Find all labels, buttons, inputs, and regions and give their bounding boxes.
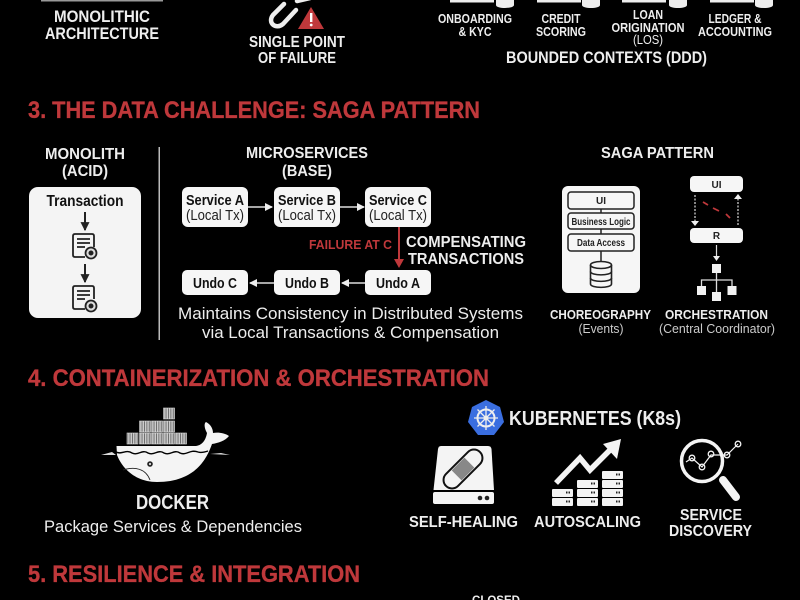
panel: monolithic architecture: ARCHITECTURE <box>45 25 159 43</box>
bounded context: credit scoring: CREDIT <box>542 11 581 26</box>
service B <box>274 187 340 227</box>
bounded context: credit scoring: SCORING <box>536 24 586 39</box>
label: compensating transactions: TRANSACTIONS <box>408 251 524 268</box>
bounded context: loan origination: (LOS) <box>633 32 663 47</box>
panel: kubernetes: KUBERNETES (K8s) <box>509 408 681 430</box>
choreography card <box>562 186 640 293</box>
icon: document 2 <box>73 286 96 312</box>
icon: database <box>590 262 612 287</box>
panel: single point of failure: OF FAILURE <box>258 50 336 67</box>
arrow: undo B to C <box>250 282 274 284</box>
arrow: undo A to B <box>342 282 365 284</box>
panel: bounded contexts <box>438 0 773 67</box>
undo B: Undo B <box>285 276 329 292</box>
bounded context: ledger and accounting: ACCOUNTING <box>698 24 772 39</box>
orchestration diagram: UI <box>712 180 722 191</box>
bounded context: loan origination: ORIGINATION <box>612 20 684 35</box>
card: transaction <box>29 187 141 318</box>
label: failure at C: FAILURE AT C <box>309 237 393 252</box>
panel: microservices BASE: MICROSERVICES <box>246 145 368 162</box>
service C: (Local Tx) <box>369 208 427 224</box>
service A: Service A <box>186 193 244 209</box>
label: orchestration: ORCHESTRATION <box>665 307 768 322</box>
bounded context: onboarding and KYC: & KYC <box>458 24 492 39</box>
card: transaction: Transaction <box>46 193 124 210</box>
panel: docker <box>44 408 302 536</box>
panel: bounded contexts: BOUNDED CONTEXTS (DDD) <box>506 48 707 67</box>
orchestration diagram <box>690 176 743 301</box>
label: orchestration <box>659 307 775 336</box>
undo B <box>274 270 340 295</box>
undo C: Undo C <box>193 276 237 292</box>
panel: saga pattern <box>550 145 775 336</box>
icon: warning triangle <box>298 7 324 29</box>
service B: (Local Tx) <box>278 208 336 224</box>
bounded context: ledger and accounting <box>698 0 773 39</box>
caption: consistency: Maintains Consistency in Distributed Systems <box>178 304 523 323</box>
heading: section 5: 5. RESILIENCE & INTEGRATION <box>28 561 360 588</box>
panel: monolith ACID: (ACID) <box>62 163 108 180</box>
service B: Service B <box>278 193 336 209</box>
panel: saga pattern: SAGA PATTERN <box>601 145 714 162</box>
label: service discovery: SERVICE <box>680 507 742 524</box>
panel: docker: DOCKER <box>136 492 209 514</box>
undo A: Undo A <box>376 276 420 292</box>
panel: single point of failure: SINGLE POINT <box>249 34 345 51</box>
icon: document 1 <box>73 234 96 258</box>
panel: monolith ACID <box>29 146 141 318</box>
arrow: B to C <box>340 206 364 208</box>
icon: service discovery magnifier <box>682 440 741 497</box>
choreography card: UI <box>596 196 606 207</box>
caption: consistency <box>178 304 523 342</box>
icon: self-healing drive <box>433 446 494 504</box>
icon: kubernetes helm <box>468 400 504 435</box>
bounded context: onboarding and KYC <box>438 0 514 39</box>
icon: broken chain link <box>271 0 310 26</box>
label: choreography: CHOREOGRAPHY <box>550 307 651 322</box>
label: choreography <box>550 307 651 336</box>
panel: monolith ACID: MONOLITH <box>45 146 125 163</box>
bounded context: loan origination: LOAN <box>633 7 663 22</box>
label: choreography: (Events) <box>578 321 624 336</box>
label: compensating transactions: COMPENSATING <box>406 234 526 251</box>
label: autoscaling: AUTOSCALING <box>534 514 641 531</box>
arrow: A to B <box>248 206 272 208</box>
bounded context: ledger and accounting: LEDGER & <box>708 11 762 26</box>
panel: monolithic architecture <box>41 0 163 43</box>
arrow: failure down <box>394 227 404 268</box>
service C: Service C <box>369 193 427 209</box>
icon: docker whale <box>101 408 230 482</box>
orchestration diagram: R <box>713 231 721 242</box>
service C <box>365 187 431 227</box>
undo C <box>182 270 248 295</box>
label: service discovery <box>669 507 752 540</box>
label: service discovery: DISCOVERY <box>669 523 752 540</box>
heading: section 3: 3. THE DATA CHALLENGE: SAGA PATTERN <box>28 97 480 124</box>
icon: autoscaling bars and arrow <box>552 439 623 506</box>
label: orchestration: (Central Coordinator) <box>659 321 775 336</box>
panel: microservices BASE <box>178 145 526 342</box>
caption: consistency: via Local Transactions & Compensation <box>202 323 499 342</box>
panel: kubernetes <box>409 400 752 540</box>
label: self-healing: SELF-HEALING <box>409 514 518 531</box>
undo A <box>365 270 431 295</box>
choreography card: Data Access <box>577 238 625 249</box>
service A <box>182 187 248 227</box>
panel: single point of failure <box>249 0 345 67</box>
bounded context: credit scoring <box>536 0 600 39</box>
panel: microservices BASE: (BASE) <box>282 163 332 180</box>
bounded context: onboarding and KYC: ONBOARDING <box>438 11 512 26</box>
label: compensating transactions <box>406 234 526 268</box>
panel: docker: Package Services & Dependencies <box>44 517 302 536</box>
panel: monolithic architecture: MONOLITHIC <box>54 8 150 26</box>
heading: section 4: 4. CONTAINERIZATION & ORCHESTRATION <box>28 365 489 392</box>
choreography card: Business Logic <box>572 217 631 228</box>
service A: (Local Tx) <box>186 208 244 224</box>
bounded context: loan origination <box>612 0 687 47</box>
